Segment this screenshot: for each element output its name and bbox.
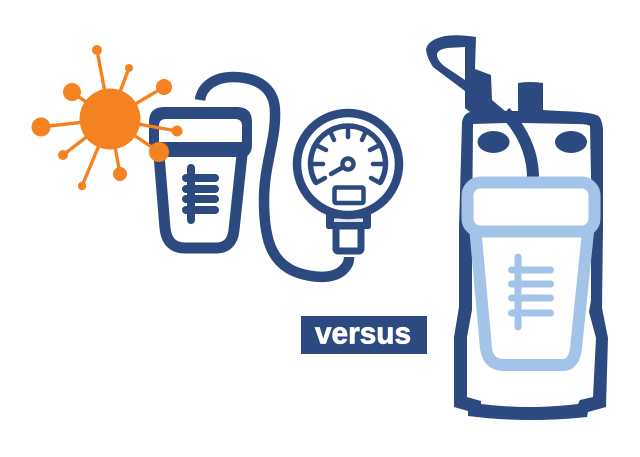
device outer shell with handle xyxy=(426,35,608,420)
icon: connecting tube from cup to gauge xyxy=(200,77,349,277)
icon: pressure gauge xyxy=(297,113,399,251)
gauge dial arc xyxy=(310,126,386,183)
cup body xyxy=(159,155,242,248)
gauge display window xyxy=(334,188,364,203)
icon: small specimen cup xyxy=(149,107,252,248)
cup lid xyxy=(149,107,252,157)
gauge tick marks xyxy=(313,127,383,183)
handle opening xyxy=(437,47,465,80)
icon: light blue specimen cup inside device xyxy=(468,182,594,365)
light cup body xyxy=(476,232,588,365)
gauge flange xyxy=(326,212,371,229)
light cup measurement marks xyxy=(512,257,550,327)
versus label: versus xyxy=(315,316,411,350)
device internal tube xyxy=(505,112,533,178)
device interior xyxy=(467,123,596,407)
gauge neck xyxy=(336,226,361,251)
virus spikes xyxy=(41,50,177,186)
icon: orange virus xyxy=(32,45,182,190)
gauge outer ring xyxy=(297,113,399,215)
cup measurement marks xyxy=(186,168,215,220)
icon: large device housing xyxy=(426,35,608,420)
light cup lid xyxy=(468,182,594,232)
gauge needle xyxy=(331,166,345,174)
device right port xyxy=(555,131,587,153)
device left port xyxy=(478,131,510,153)
virus core xyxy=(80,88,140,150)
